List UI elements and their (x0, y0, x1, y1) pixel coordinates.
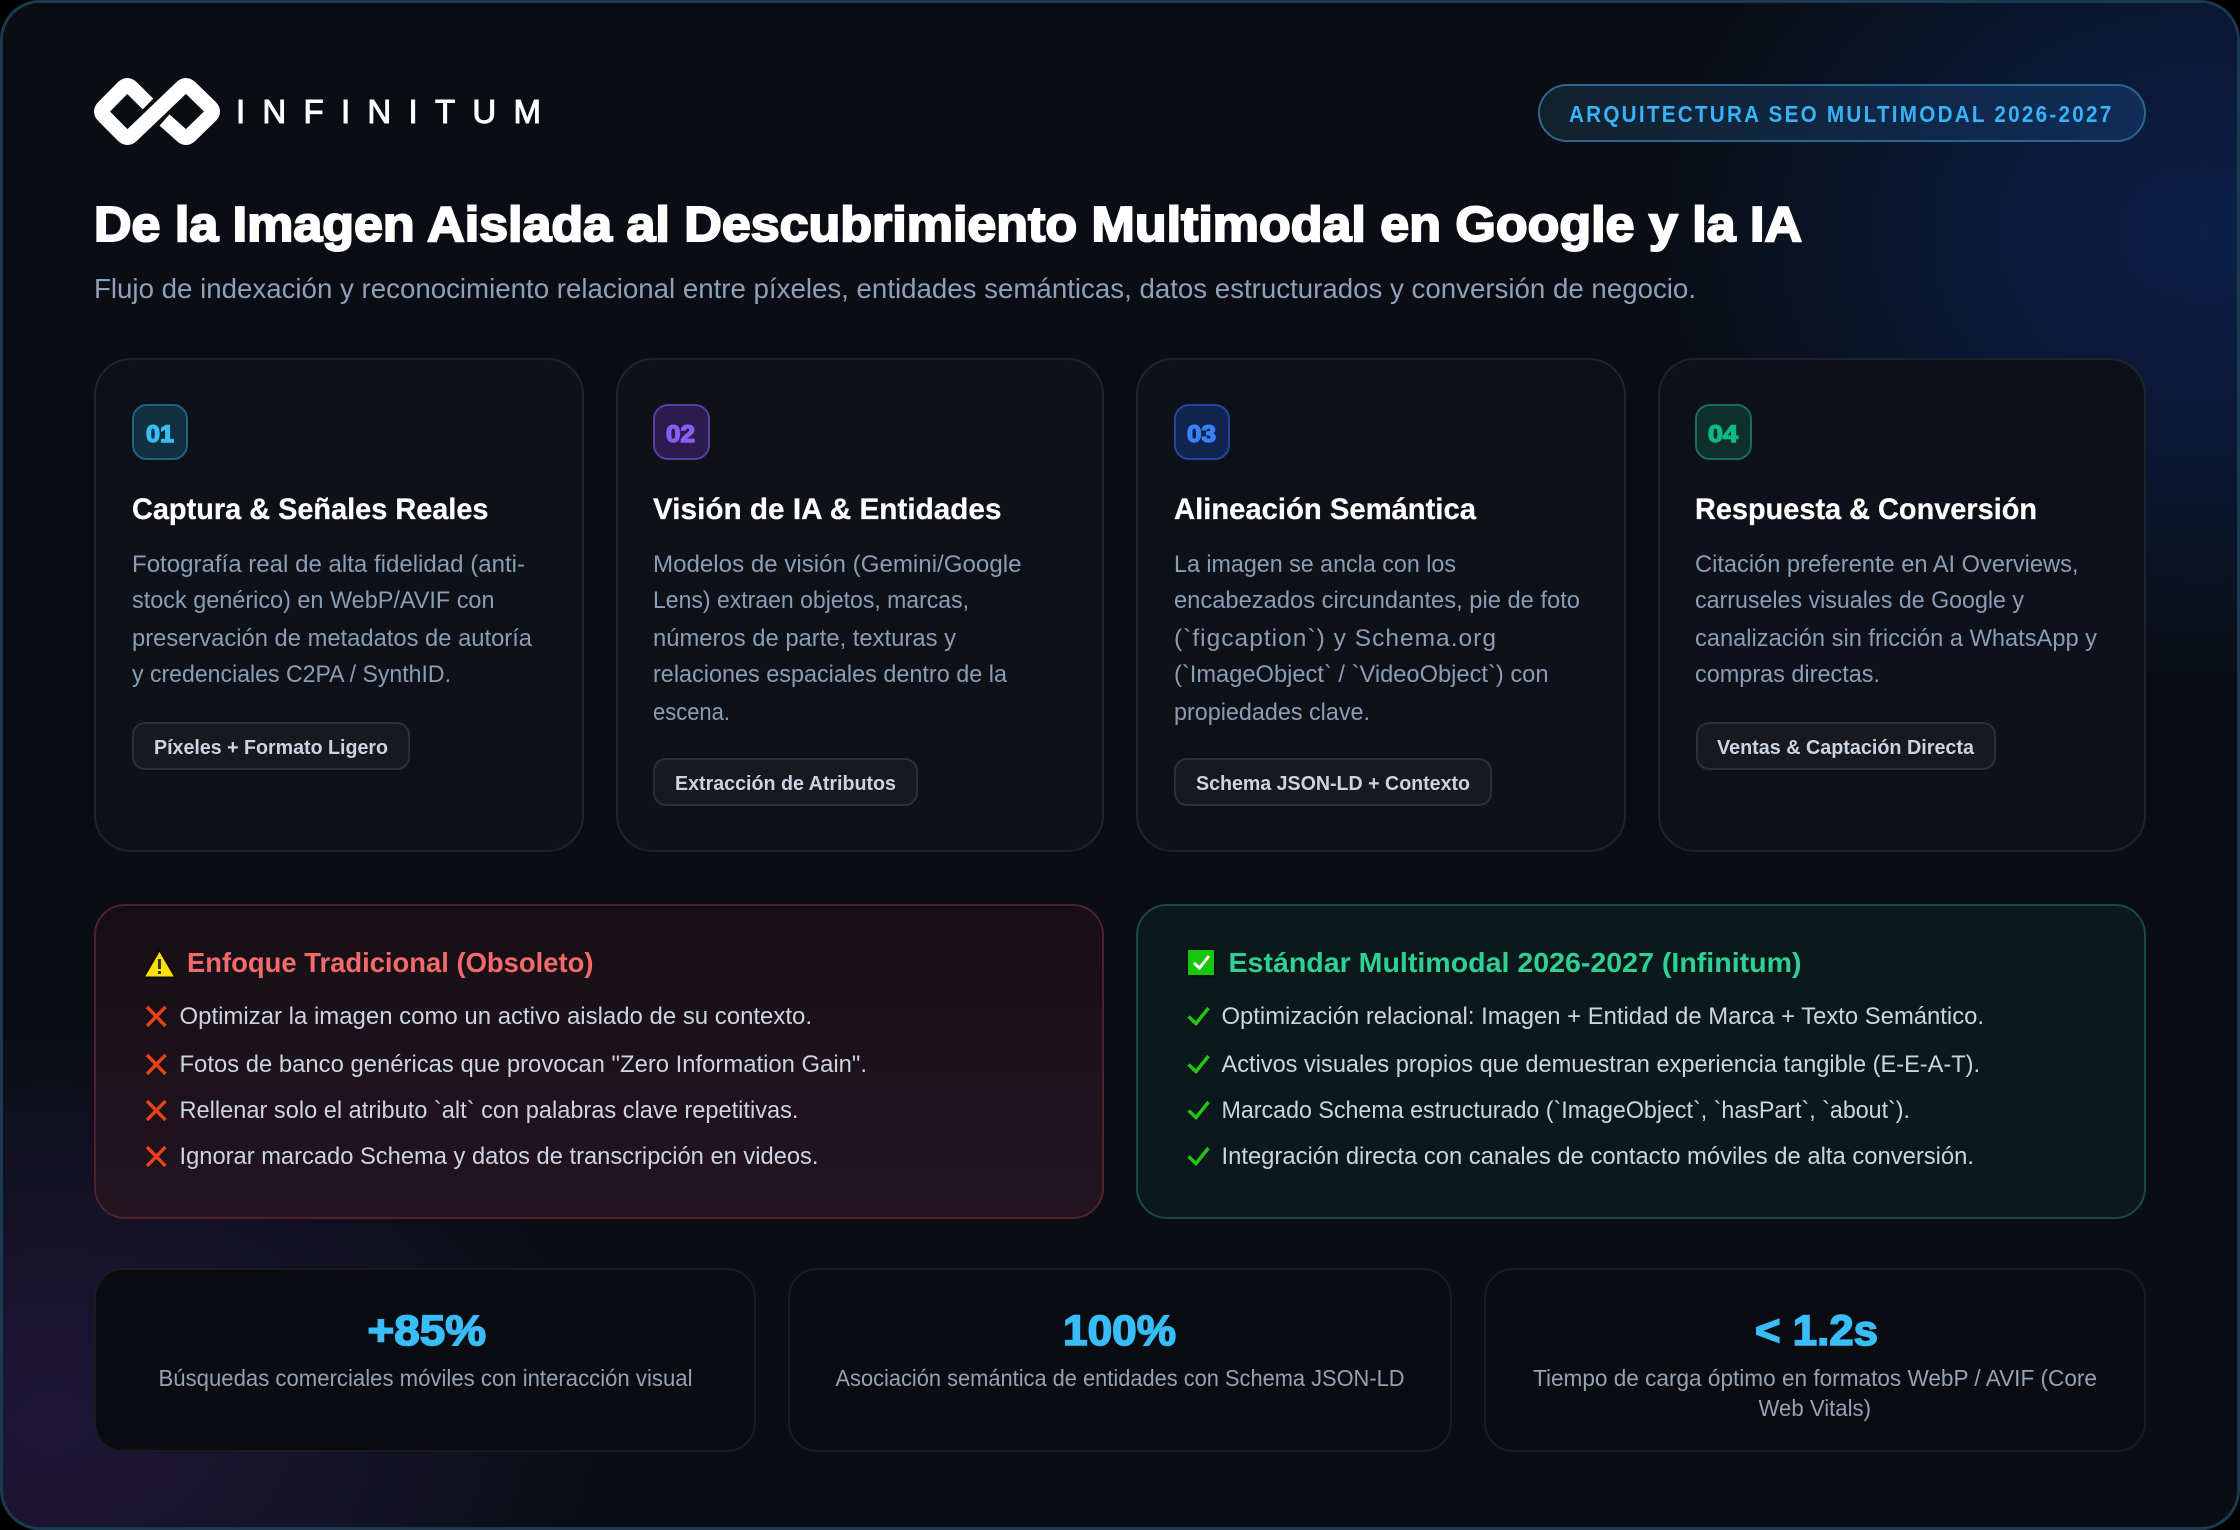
description (653, 551, 1022, 726)
heading: Captura & Señales Reales (132, 493, 488, 526)
badge 04: 04 (1708, 421, 1738, 448)
tag: Extracción de Atributos (675, 773, 896, 795)
badge 02 (654, 405, 709, 459)
icon: infinity logo mark (102, 85, 212, 138)
icon: warning triangle (144, 950, 176, 978)
tag (133, 723, 409, 769)
stat card: 85 percent: +85% (368, 1307, 486, 1355)
description: encabezados circundantes, pie de foto (1174, 587, 1580, 614)
badge 03 (1175, 405, 1229, 459)
stat card: load time: Tiempo de carga óptimo en formatos WebP / AVIF (Core (1533, 1365, 2097, 1391)
badge 04 (1696, 405, 1751, 459)
list item: Ignorar marcado Schema y datos de transcripción en videos. (180, 1143, 818, 1170)
stat card: load time: < 1.2s (1755, 1307, 1878, 1355)
description: relaciones espaciales dentro de la (653, 661, 1007, 688)
tag: Schema JSON-LD + Contexto (1196, 773, 1470, 795)
list item: Activos visuales propios que demuestran experiencia tangible (E-E-A-T). (1222, 1051, 1980, 1078)
description (132, 551, 532, 688)
description: Lens) extraen objetos, marcas, (653, 587, 969, 614)
stat card: 85 percent (95, 1269, 755, 1451)
description: (`ImageObject` / `VideoObject`) con (1174, 661, 1548, 688)
description: preservación de metadatos de autoría (132, 625, 532, 652)
list item: Marcado Schema estructurado (`ImageObject`, `hasPart`, `about`). (1222, 1097, 1910, 1124)
tag: Píxeles + Formato Ligero (154, 737, 388, 759)
stat card: 100 percent: 100% (1063, 1307, 1176, 1355)
heading: Alineación Semántica (1174, 493, 1477, 526)
list item: Integración directa con canales de contacto móviles de alta conversión. (1222, 1143, 1974, 1170)
stat card: load time (1485, 1269, 2145, 1451)
logo (102, 85, 541, 138)
description: canalización sin fricción a WhatsApp y (1695, 625, 2098, 652)
icon: green check box (1187, 949, 1215, 976)
description: Fotografía real de alta fidelidad (anti- (132, 551, 525, 578)
panel: step 02 (617, 359, 1103, 851)
panel: step 03 (1137, 359, 1625, 851)
stat card: 85 percent: Búsquedas comerciales móviles con interacción visual (158, 1365, 692, 1391)
description: números de parte, texturas y (653, 625, 957, 652)
list item: Optimización relacional: Imagen + Entidad de Marca + Texto Semántico. (1222, 1003, 1984, 1030)
description: (`figcaption`) y Schema.org (1174, 625, 1496, 652)
tag (1697, 723, 1995, 769)
description: Citación preferente en AI Overviews, (1695, 551, 2078, 578)
heading: Respuesta & Conversión (1695, 493, 2037, 526)
logo wordmark: INFINITUM (236, 93, 541, 130)
panel: step 04 (1659, 359, 2145, 851)
description: stock genérico) en WebP/AVIF con (132, 587, 494, 614)
stat card: 100 percent (789, 1269, 1451, 1451)
description: compras directas. (1695, 661, 1880, 688)
list item: Optimizar la imagen como un activo aislado de su contexto. (180, 1003, 812, 1030)
heading: Estándar Multimodal 2026-2027 (Infinitum) (1228, 947, 1802, 978)
description: Modelos de visión (Gemini/Google (653, 551, 1022, 578)
panel: step 01 (95, 359, 583, 851)
description: carruseles visuales de Google y (1695, 587, 2025, 614)
badge 01: 01 (146, 421, 174, 448)
heading: Visión de IA & Entidades (653, 493, 1002, 526)
header tag pill: ARQUITECTURA SEO MULTIMODAL 2026-2027 (1569, 101, 2114, 127)
description: La imagen se ancla con los (1174, 551, 1456, 578)
stat card: load time: Web Vitals) (1758, 1395, 1871, 1421)
badge 02: 02 (666, 421, 695, 448)
tag (654, 759, 917, 805)
list item: Rellenar solo el atributo `alt` con palabras clave repetitivas. (180, 1097, 798, 1124)
description (1695, 551, 2098, 688)
description: propiedades clave. (1174, 699, 1370, 726)
description: y credenciales C2PA / SynthID. (132, 661, 451, 688)
description (1174, 551, 1580, 726)
list item: Fotos de banco genéricas que provocan "Zero Information Gain". (180, 1051, 867, 1078)
badge 01 (133, 405, 187, 459)
tag (1175, 759, 1491, 805)
badge 03: 03 (1187, 421, 1216, 448)
tag: Ventas & Captación Directa (1717, 737, 1975, 759)
header tag pill (1539, 85, 2145, 141)
description: escena. (653, 699, 730, 726)
subtitle: Flujo de indexación y reconocimiento relacional entre píxeles, entidades semánticas, datos estructurados y conversión de negocio. (94, 273, 1696, 304)
panel: traditional approach (95, 905, 1103, 1218)
stat card: 100 percent: Asociación semántica de entidades con Schema JSON-LD (836, 1365, 1404, 1391)
heading: Enfoque Tradicional (Obsoleto) (187, 947, 594, 978)
title: De la Imagen Aislada al Descubrimiento Multimodal en Google y la IA (94, 198, 1802, 252)
panel: multimodal standard (1137, 905, 2145, 1218)
